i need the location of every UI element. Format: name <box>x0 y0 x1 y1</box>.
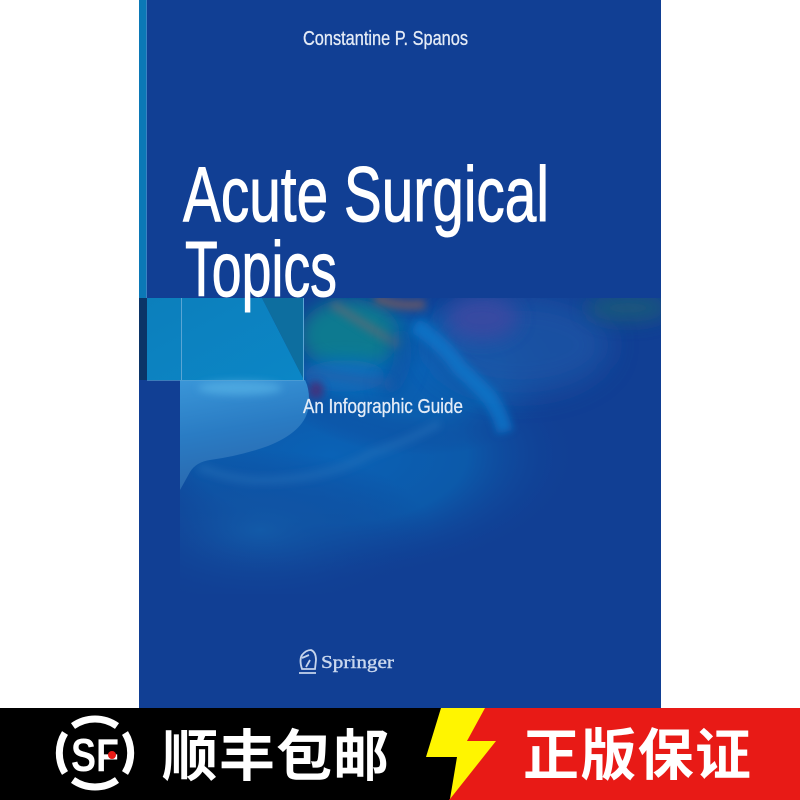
band panel diagonal <box>262 298 303 378</box>
banner text: genuine: 正版保证 <box>523 724 751 787</box>
banner black background <box>0 708 800 800</box>
icon: Springer horse <box>299 650 316 673</box>
title line 2: Topics <box>185 225 337 313</box>
author name: Constantine P. Spanos <box>303 28 468 50</box>
abstract swirl artwork <box>139 298 661 568</box>
left accent stripe <box>139 0 147 298</box>
pale blob <box>180 380 309 490</box>
blob highlight <box>198 381 282 395</box>
title line 1: Acute Surgical <box>183 150 549 238</box>
icon: lightning bolt <box>426 708 496 799</box>
dark band edge <box>139 298 147 380</box>
band panel left <box>147 298 303 380</box>
icon: SF logo: SF <box>71 729 119 781</box>
subtitle: An Infographic Guide <box>303 396 463 418</box>
banner red panel <box>449 708 800 800</box>
icon: SF logo <box>59 719 131 787</box>
band lines <box>147 298 304 381</box>
publisher name: Springer <box>321 652 394 672</box>
banner text: shipping: 顺丰包邮 <box>162 725 389 788</box>
book cover background <box>139 0 661 708</box>
